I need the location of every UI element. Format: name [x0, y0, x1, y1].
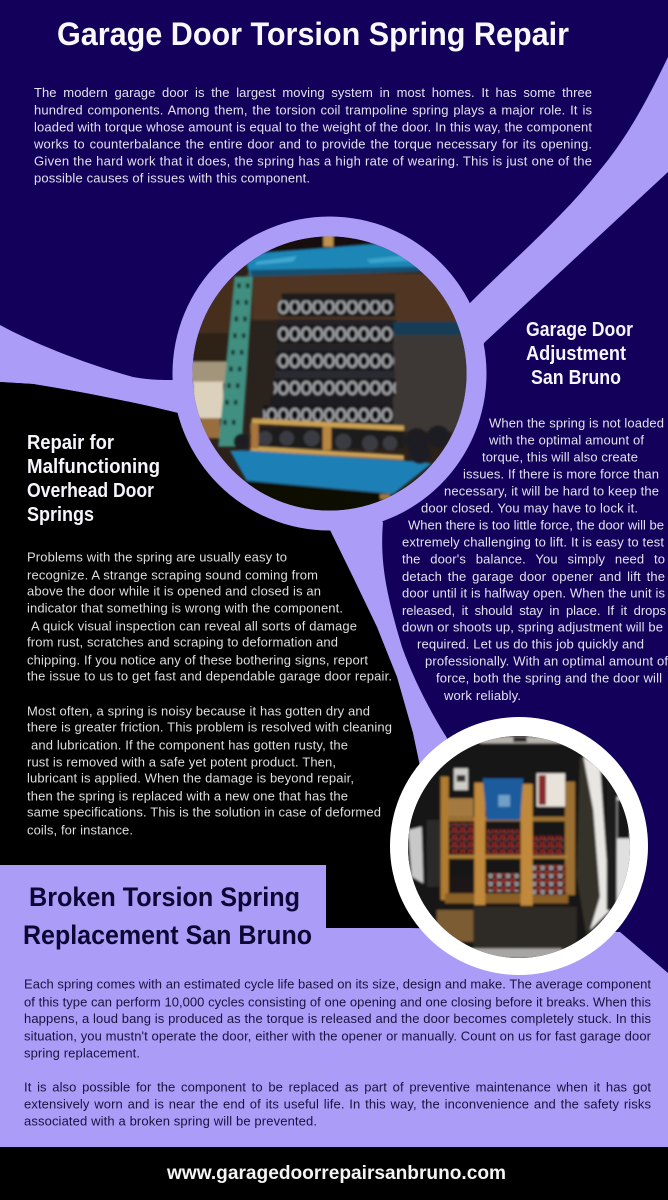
text block: adjustment description: When the spring is not loaded: [489, 416, 664, 430]
text block: spring problems: above the door while it is opened and closed is an: [27, 584, 321, 598]
text block: spring solutions: lubricant is applied. When the damage is beyond repair,: [27, 770, 354, 786]
heading: garage door adjustment: Adjustment: [526, 343, 626, 365]
text block: preventive maintenance: associated with a broken spring will be prevented.: [24, 1114, 317, 1128]
text block: introduction: hundred components. Among them, the torsion coil trampoline spring plays a major role. It is: [34, 102, 592, 118]
footer website url: www.garagedoorrepairsanbruno.com: [166, 1163, 506, 1184]
text block: cycle life: spring replacement.: [24, 1046, 140, 1060]
text block: adjustment description: extremely challenging to lift. It is easy to test: [402, 534, 664, 550]
text block: preventive maintenance: extensively worn and is near the end of its useful life. In this way, the inconvenience and the safety risks: [24, 1096, 652, 1112]
text block: preventive maintenance: It is also possible for the component to be replaced as part of preventive maintenance when it has got: [24, 1080, 651, 1094]
photo: torsion springs on warehouse rack: [172, 216, 486, 530]
wood shelf frame: [441, 777, 449, 900]
text block: adjustment description: issues. If there is more force than: [463, 466, 659, 482]
text block: cycle life: [24, 976, 652, 1060]
text block: adjustment description: work reliably.: [443, 688, 521, 703]
text block: spring problems: the issue to us to get fast and dependable garage door repair.: [27, 668, 392, 684]
text block: spring problems: chipping. If you notice any of these bothering signs, report: [27, 652, 368, 668]
panel: lavender replacement section: [0, 865, 668, 1147]
text block: introduction: works to counterbalance the entire door and to provide the torque necessary for its opening.: [33, 136, 592, 152]
text block: spring problems: [27, 550, 392, 684]
heading: garage door adjustment: San Bruno: [531, 367, 621, 389]
text block: cycle life: Each spring comes with an estimated cycle life based on its size, design and make. The average component: [24, 976, 651, 992]
heading: repair for malfunctioning overhead door springs: Malfunctioning: [27, 456, 160, 478]
text block: spring solutions: then the spring is replaced with a new one that has the: [27, 788, 348, 804]
lower blue beam: [230, 451, 432, 494]
text block: adjustment description: When there is too little force, the door will be: [408, 518, 664, 532]
heading: garage door adjustment: [526, 319, 633, 389]
text block: spring problems: Problems with the spring are usually easy to: [27, 550, 287, 564]
text block: adjustment description: torque, this will also create: [482, 450, 638, 464]
text block: spring solutions: rust is removed with a safe yet potent product. Then,: [27, 754, 336, 770]
spring rows: [282, 293, 395, 317]
text block: adjustment description: [402, 416, 668, 703]
heading: repair for malfunctioning overhead door springs: Overhead Door: [27, 480, 154, 502]
text block: introduction: The modern garage door is the largest moving system in most homes. It has some three: [34, 85, 592, 100]
swoosh: lavender band beside right panel: [300, 500, 447, 810]
photo: van loaded with springs: [390, 717, 648, 975]
text block: spring solutions: [27, 704, 392, 838]
panel: black footer bar: [0, 1147, 668, 1200]
heading: broken torsion spring replacement: Replacement San Bruno: [23, 920, 312, 950]
text block: adjustment description: necessary, it will be hard to keep the: [444, 484, 659, 498]
wood posts: [474, 783, 485, 905]
text block: spring solutions: there is greater friction. This problem is resolved with cleaning: [27, 720, 392, 734]
heading: broken torsion spring replacement: [23, 882, 312, 950]
text block: spring problems: A quick visual inspection can reveal all sorts of damage: [31, 618, 357, 634]
heading: garage door adjustment: Garage Door: [526, 319, 633, 341]
text block: introduction: possible causes of issues with this component.: [34, 170, 310, 186]
swoosh: left lavender band: [0, 325, 200, 420]
text block: adjustment description: door closed. You may have to lock it.: [421, 500, 638, 516]
green upright post: [218, 277, 253, 447]
swoosh: top right lavender band: [440, 57, 668, 400]
text block: adjustment description: released, it should stay in place. If it drops: [402, 603, 666, 618]
text block: adjustment description: professionally. With an optimal amount of: [425, 654, 668, 668]
text block: adjustment description: door until it is halfway open. When the unit is: [402, 586, 666, 600]
van floor: [473, 907, 577, 950]
boxes: [537, 773, 565, 807]
text block: adjustment description: detach the garage door opener and lift the: [402, 569, 665, 584]
text block: introduction: Given the hard work that it does, the spring has a high rate of wearing. This is just one of the: [34, 154, 592, 168]
text block: adjustment description: force, both the spring and the door will: [436, 670, 662, 686]
text block: cycle life: of this type can perform 10,000 cycles consisting of one opening and one closing before it breaks. When this: [24, 994, 652, 1010]
text block: spring solutions: same specifications. This is the solution in case of deformed: [27, 804, 381, 820]
heading: repair for malfunctioning overhead door springs: [27, 432, 160, 526]
text block: adjustment description: required. Let us do this job quickly and: [417, 636, 644, 652]
text block: adjustment description: the door's balance. You simply need to: [402, 552, 665, 566]
heading: broken torsion spring replacement: Broken Torsion Spring: [29, 882, 300, 912]
text block: preventive maintenance: [24, 1080, 652, 1128]
text block: cycle life: situation, you mustn't operate the door, either with the opener or manually. Count on us for fast garage door: [24, 1028, 652, 1044]
text block: adjustment description: with the optimal amount of: [488, 432, 644, 448]
text block: spring solutions: and lubrication. If the component has gotten rusty, the: [31, 738, 348, 752]
text block: spring problems: from rust, scratches and scraping to deformation and: [27, 634, 338, 650]
text block: introduction: [33, 85, 592, 186]
title: Garage Door Torsion Spring Repair: [57, 16, 569, 52]
heading: repair for malfunctioning overhead door springs: Springs: [27, 504, 94, 526]
panel: black repair panel: [0, 382, 425, 932]
text block: spring problems: recognize. A strange scraping sound coming from: [27, 568, 318, 582]
wooden crate: [253, 428, 404, 448]
text block: spring solutions: Most often, a spring is noisy because it has gotten dry and: [27, 704, 370, 718]
text block: cycle life: happens, a loud bang is produced as the torque is released and the door becomes completely stuck. In this: [24, 1011, 652, 1026]
spring compartments: [449, 823, 473, 853]
van door: [576, 756, 606, 936]
text block: introduction: loaded with torque whose amount is equal to the weight of the door. In this way, the component: [34, 120, 592, 134]
heading: repair for malfunctioning overhead door springs: Repair for: [27, 432, 114, 454]
blue bin: [483, 778, 523, 820]
text block: spring solutions: coils, for instance.: [27, 822, 133, 838]
text block: adjustment description: down or shoots up, spring adjustment will be: [402, 620, 663, 634]
spring pile right: [234, 425, 450, 464]
text block: spring problems: indicator that something is wrong with the component.: [27, 600, 343, 616]
